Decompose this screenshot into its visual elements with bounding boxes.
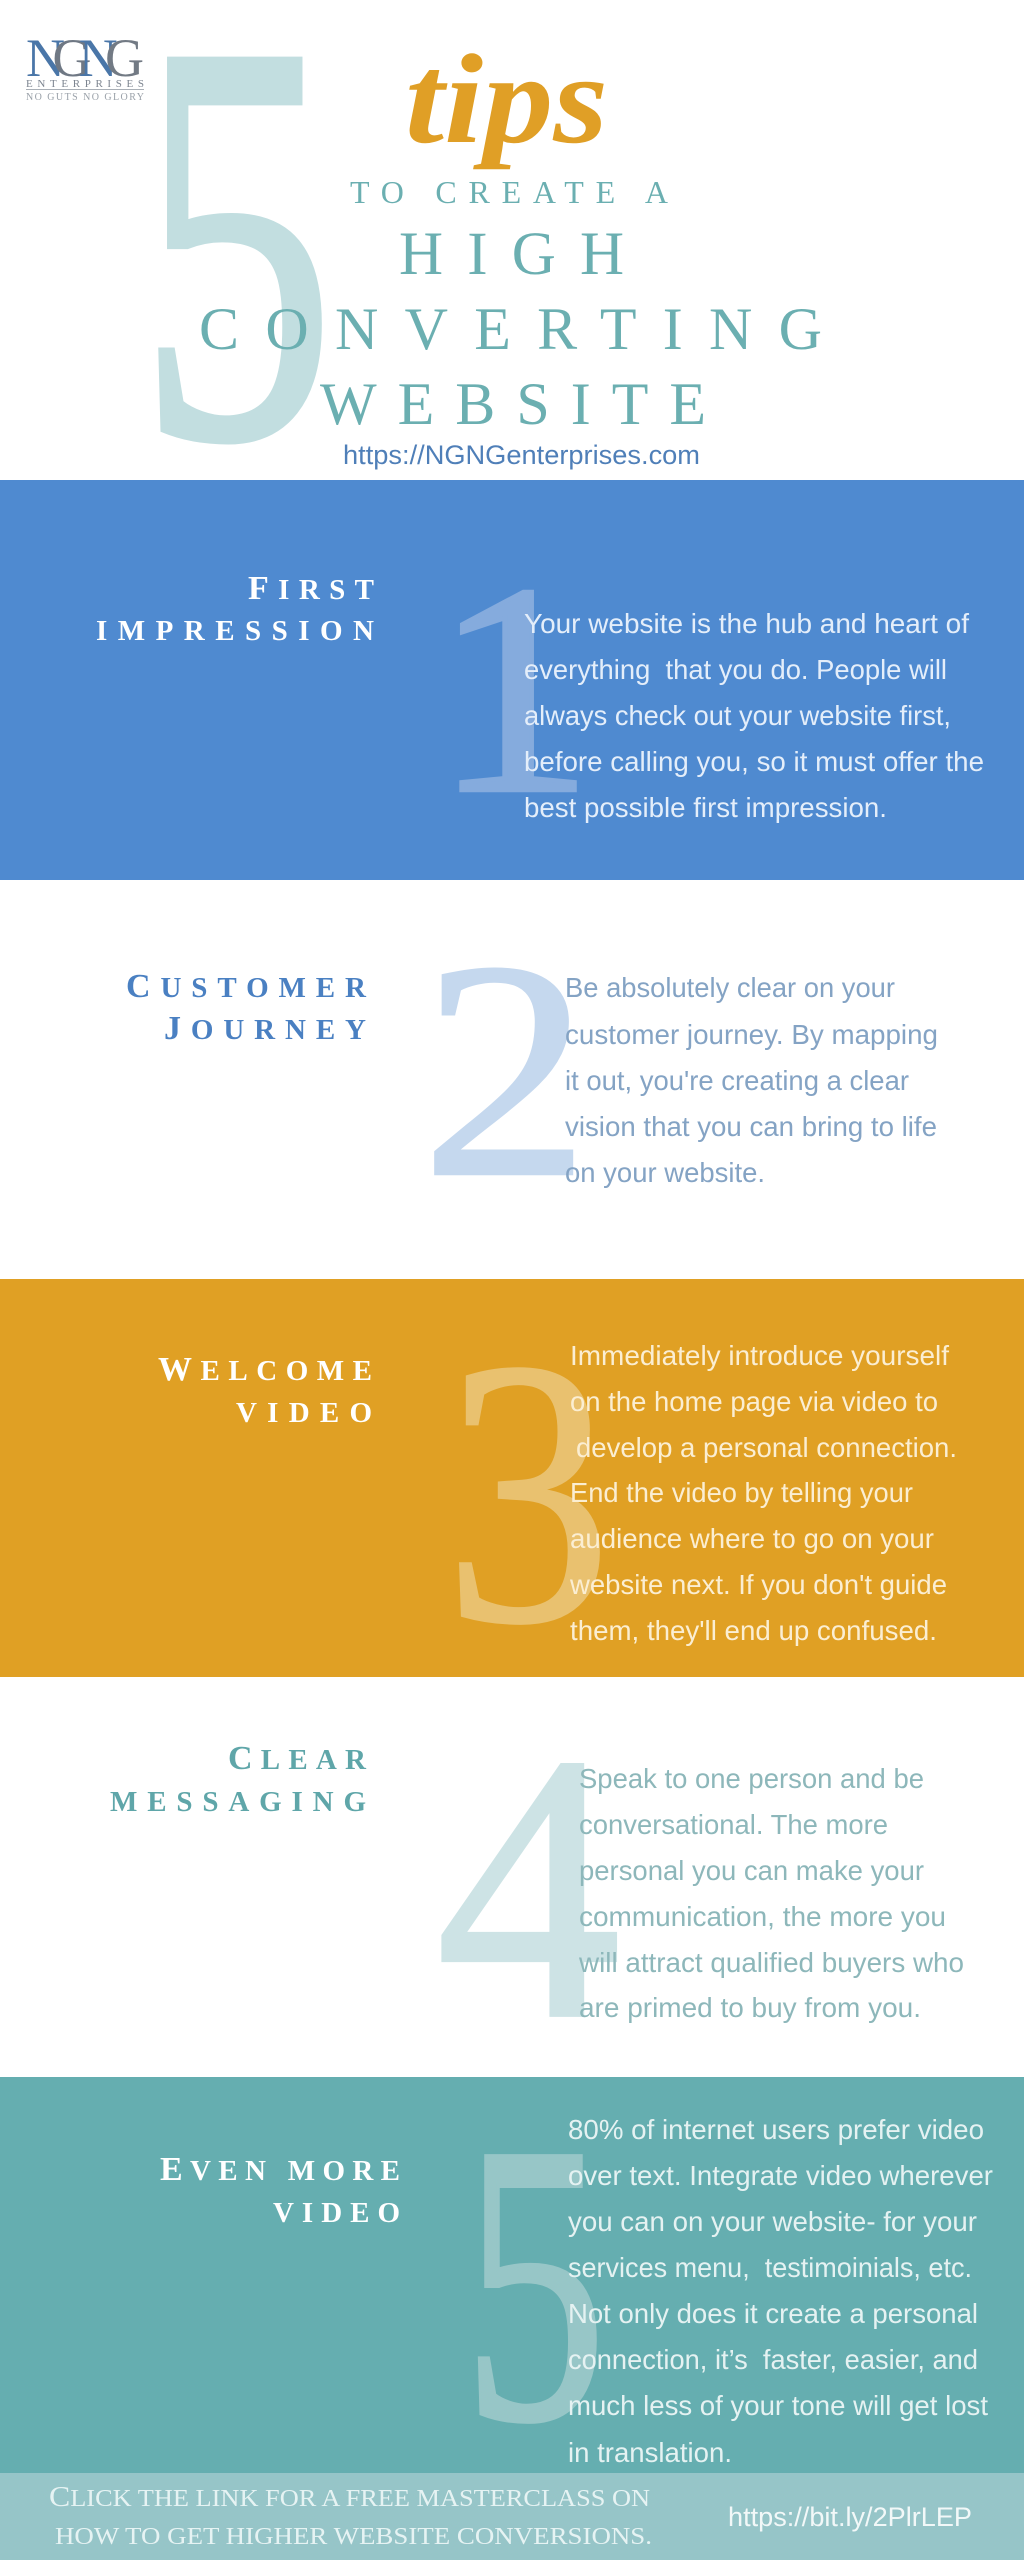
masterclass call to action text: CLICK THE LINK FOR A FREE MASTERCLASS ON (49, 2481, 650, 2513)
heading: VIDEO (236, 1397, 372, 1429)
body text (568, 2114, 993, 2468)
heading: VIDEO (273, 2197, 400, 2229)
body text: audience where to go on your (570, 1523, 934, 1554)
body text (565, 972, 938, 1188)
heading (158, 1351, 372, 1429)
panel: tip 4 clear messaging (110, 1678, 964, 2098)
body text: Speak to one person and be (579, 1763, 924, 1794)
body text: Immediately introduce yourself (570, 1340, 949, 1371)
heading: J OURNEY (164, 1010, 366, 1047)
body text: End the video by telling your (570, 1477, 913, 1508)
body text: develop a personal connection. (576, 1432, 957, 1463)
logo: NGNG Enterprises: NGNG (26, 28, 144, 88)
heading (110, 1740, 367, 1818)
body text: always check out your website first, (524, 700, 951, 731)
heading: C LEAR (228, 1740, 367, 1777)
panel: tip 3 welcome video (0, 1279, 1024, 1703)
title: tips: tips (405, 28, 608, 170)
panel: tip 1 first impression (0, 480, 1024, 880)
body text: over text. Integrate video wherever (568, 2160, 993, 2191)
heading: E VEN MORE (160, 2151, 400, 2188)
body text: before calling you, so it must offer the (524, 746, 984, 777)
numeral 3: 3 (444, 1281, 612, 1703)
heading: MESSAGING (110, 1786, 366, 1818)
body text: 80% of internet users prefer video (568, 2114, 984, 2145)
masterclass call to action text: HOW TO GET HIGHER WEBSITE CONVERSIONS. (55, 2524, 652, 2550)
body text: customer journey. By mapping (565, 1019, 938, 1050)
body text: Be absolutely clear on your (565, 972, 895, 1003)
title: website: WEBSITE (320, 371, 706, 437)
panel: header (26, 0, 822, 561)
numeral 5: 5 (463, 2062, 607, 2505)
body text: are primed to buy from you. (579, 1992, 921, 2023)
heading (160, 2151, 400, 2229)
body text: you can on your website- for your (568, 2206, 977, 2237)
body text: will attract qualified buyers who (578, 1947, 964, 1978)
logo: NGNG Enterprises: NO GUTS NO GLORY (26, 92, 144, 103)
body text: services menu, testimoinials, etc. (568, 2252, 972, 2283)
body text: communication, the more you (579, 1901, 946, 1932)
body text (569, 1340, 957, 1646)
body text: conversational. The more (579, 1809, 888, 1840)
body text (524, 608, 984, 823)
body text: connection, it’s faster, easier, and (568, 2344, 978, 2375)
heading: W ELCOME (158, 1351, 372, 1388)
body text: everything that you do. People will (524, 654, 947, 685)
body text: website next. If you don't guide (569, 1569, 947, 1600)
body text: in translation. (568, 2437, 732, 2468)
heading: C USTOMER (126, 968, 367, 1005)
title: converting: CONVERTING (199, 296, 822, 362)
numeral 2: 2 (421, 899, 591, 1242)
body text: much less of your tone will get lost (568, 2390, 988, 2421)
body text: Not only does it create a personal (568, 2298, 978, 2329)
body text: Your website is the hub and heart of (524, 608, 969, 639)
numeral 4: 4 (436, 1678, 621, 2098)
body text: vision that you can bring to life (565, 1111, 937, 1142)
panel: tip 5 even more video (0, 2062, 1024, 2505)
numeral 1: 1 (434, 524, 594, 856)
masterclass url: https://bit.ly/2PlrLEP (728, 2502, 972, 2532)
body text: personal you can make your (579, 1855, 924, 1886)
heading (126, 968, 367, 1047)
body text: them, they'll end up confused. (570, 1615, 937, 1646)
heading: IMPRESSION (96, 615, 374, 647)
body text: on your website. (565, 1157, 765, 1188)
title: to create a: TO CREATE A (350, 174, 668, 210)
logo: NGNG Enterprises: ENTERPRISES (26, 78, 144, 90)
heading: F IRST (248, 570, 374, 607)
website url: https://NGNGenterprises.com (343, 440, 700, 470)
title: high: HIGH (399, 221, 624, 288)
body text: best possible first impression. (524, 792, 887, 823)
body text (578, 1763, 964, 2023)
masterclass call to action text (49, 2481, 652, 2550)
body text: it out, you're creating a clear (565, 1065, 909, 1096)
panel: footer call to action (0, 2473, 1024, 2560)
panel: tip 2 customer journey (126, 899, 938, 1242)
heading (96, 570, 374, 647)
body text: on the home page via video to (570, 1386, 938, 1417)
